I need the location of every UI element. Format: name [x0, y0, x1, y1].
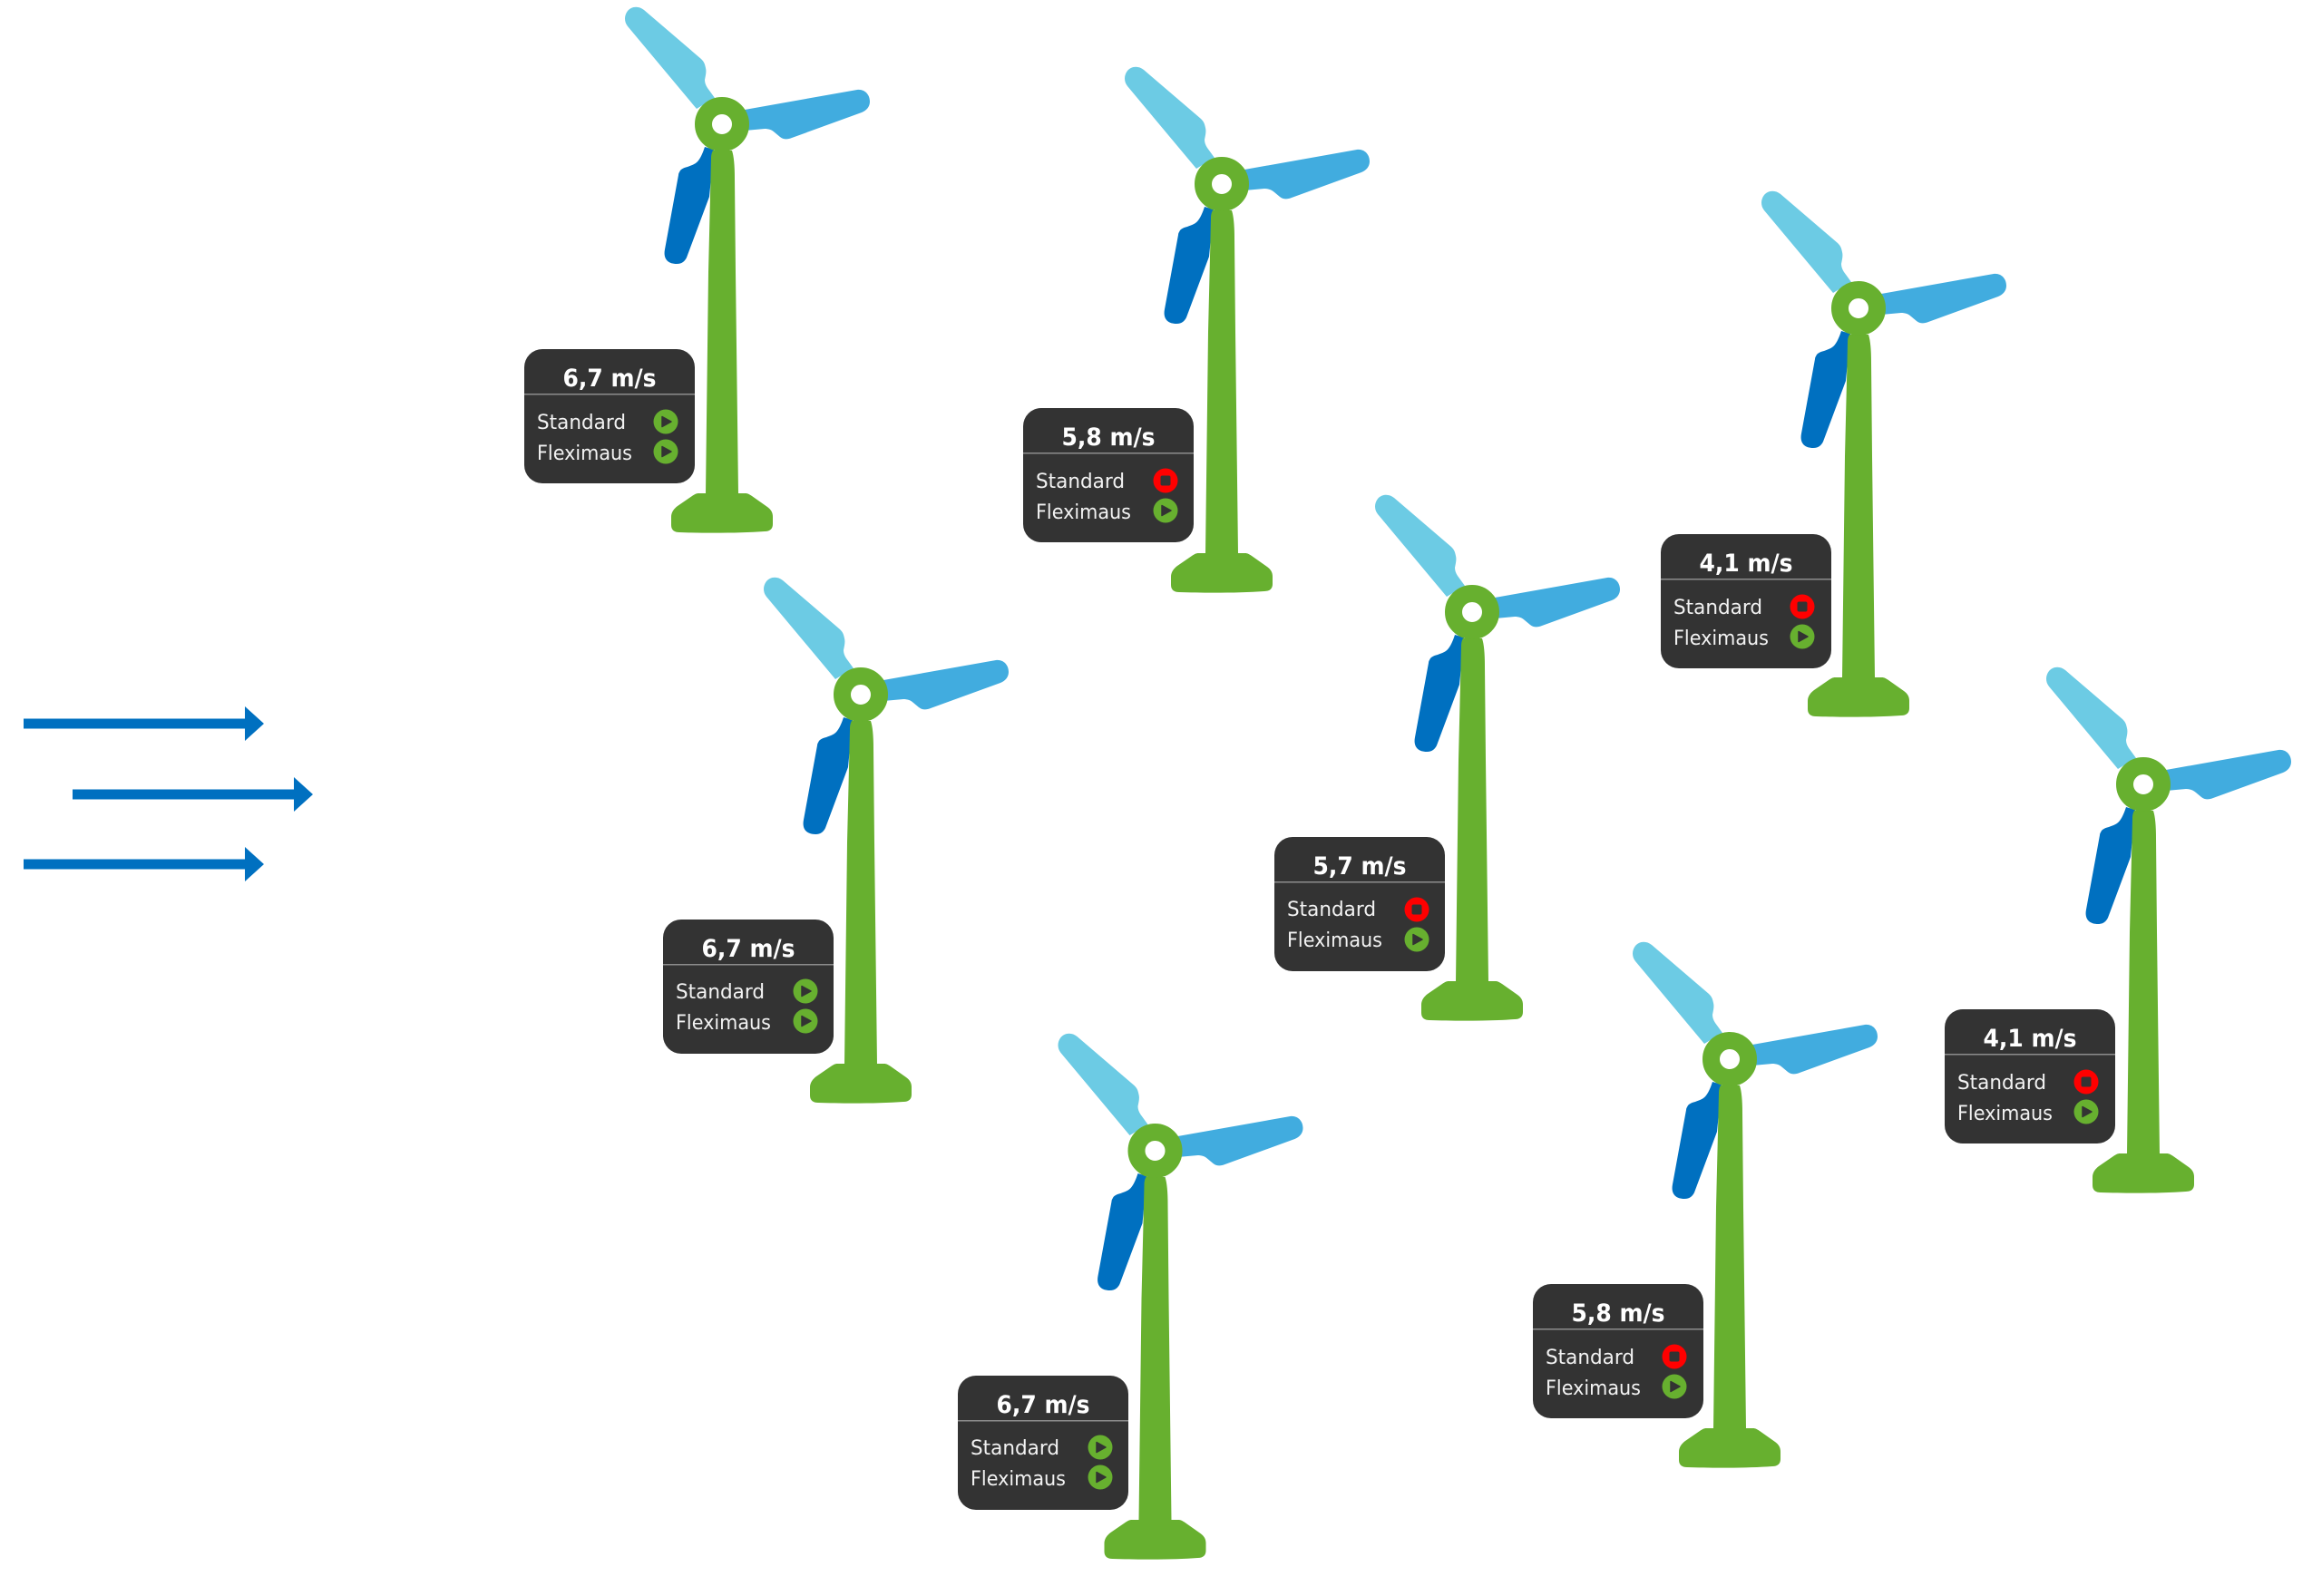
card: turbine 7	[1533, 1284, 1703, 1418]
card: turbine 4: Fleximaus	[1287, 929, 1382, 952]
card: turbine 8	[958, 1376, 1128, 1510]
card: turbine 2: 5,8 m/s	[1061, 423, 1156, 452]
card: turbine 5: Standard	[676, 981, 765, 1004]
card: turbine 6: 4,1 m/s	[1983, 1025, 2077, 1053]
card: turbine 5: 6,7 m/s	[702, 935, 795, 963]
card: turbine 3: Fleximaus	[1673, 628, 1769, 650]
card: turbine 2: Fleximaus	[1036, 501, 1131, 524]
card: turbine 5: Fleximaus	[676, 1012, 771, 1035]
turbine 5	[764, 578, 1009, 1104]
card: turbine 8: 6,7 m/s	[996, 1391, 1090, 1419]
turbine 8	[1058, 1034, 1302, 1560]
card: turbine 6	[1945, 1009, 2115, 1143]
turbine 6	[2046, 667, 2291, 1193]
card: turbine 4: 5,7 m/s	[1313, 852, 1406, 881]
card: turbine 3	[1661, 534, 1831, 668]
card: turbine 8: Fleximaus	[971, 1468, 1066, 1491]
card: turbine 3: 4,1 m/s	[1700, 550, 1792, 578]
card: turbine 1: 6,7 m/s	[562, 365, 657, 393]
card: turbine 4	[1274, 837, 1445, 971]
turbine 4	[1375, 495, 1620, 1021]
arrow: wind bottom	[24, 847, 264, 881]
card: turbine 1: Fleximaus	[537, 443, 632, 465]
card: turbine 4: Standard	[1287, 899, 1376, 921]
card: turbine 6: Fleximaus	[1957, 1103, 2053, 1125]
turbine 7	[1633, 942, 1878, 1468]
card: turbine 7: Fleximaus	[1546, 1377, 1641, 1400]
card: turbine 7: Standard	[1546, 1347, 1634, 1369]
card: turbine 1: Standard	[537, 412, 626, 434]
arrow: wind middle	[73, 777, 313, 812]
card: turbine 5	[663, 920, 834, 1054]
card: turbine 3: Standard	[1673, 597, 1762, 619]
card: turbine 2: Standard	[1036, 471, 1125, 493]
turbine 3	[1761, 191, 2006, 717]
card: turbine 8: Standard	[971, 1437, 1059, 1460]
card: turbine 7: 5,8 m/s	[1571, 1299, 1665, 1328]
card: turbine 1	[524, 349, 695, 483]
turbine 1	[625, 7, 870, 533]
turbine 2	[1125, 67, 1370, 593]
card: turbine 2	[1023, 408, 1194, 542]
arrow: wind top	[24, 706, 264, 741]
card: turbine 6: Standard	[1957, 1072, 2046, 1095]
